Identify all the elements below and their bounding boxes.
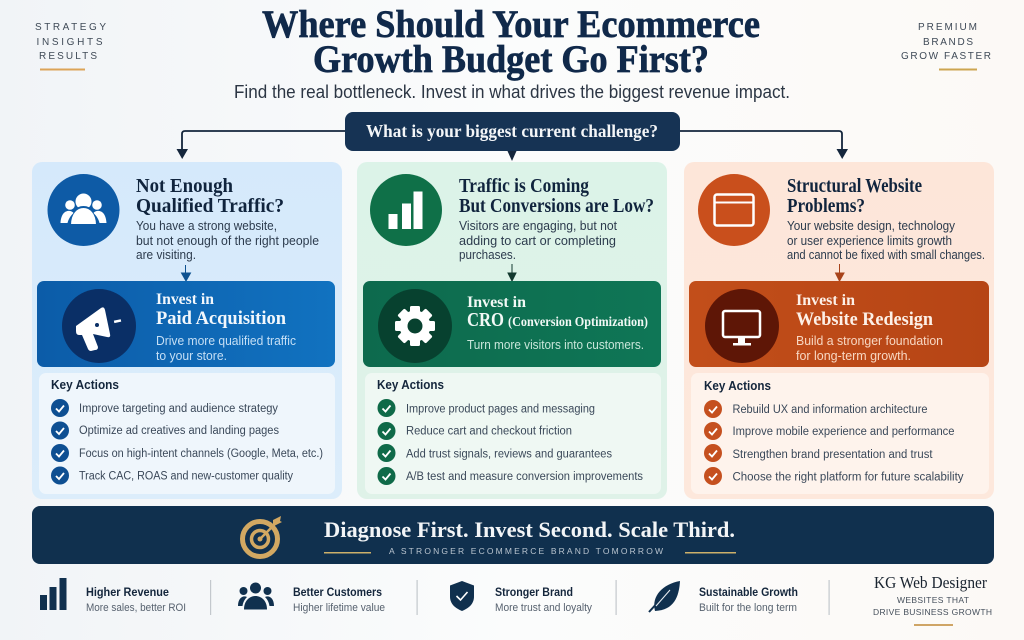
invest box (37, 281, 335, 367)
question pill: What is your biggest current challenge? (366, 121, 658, 141)
key actions (365, 373, 661, 494)
description: but not enough of the right people (136, 233, 319, 248)
text: Invest in (156, 291, 214, 308)
key actions: Rebuild UX and information architecture (732, 404, 928, 416)
description: for long-term growth. (796, 348, 911, 363)
text (156, 291, 286, 329)
right tagline: BRANDS (923, 37, 973, 48)
arrow: to website panel (678, 131, 848, 159)
heading: Qualified Traffic? (136, 195, 284, 217)
brand signature: DRIVE BUSINESS GROWTH (873, 607, 992, 617)
description: and cannot be fixed with small changes. (787, 247, 985, 262)
heading (787, 175, 922, 217)
description (796, 333, 943, 363)
invest box (363, 281, 661, 367)
key actions: Choose the right platform for future scalability (732, 472, 964, 484)
brand signature: KG Web Designer (874, 573, 987, 592)
description (787, 218, 985, 262)
key actions (39, 373, 335, 494)
icon: bars (40, 578, 66, 610)
subtitle: Find the real bottleneck. Invest in what drives the biggest revenue impact. (234, 82, 790, 102)
arrow (508, 264, 516, 281)
key actions (691, 373, 989, 494)
icon: gear (378, 289, 452, 363)
title (262, 3, 760, 81)
key actions: Focus on high-intent channels (Google, Meta, etc.) (79, 448, 323, 460)
text: CRO (467, 309, 504, 331)
text: Website Redesign (796, 309, 933, 330)
heading: Problems? (787, 195, 865, 217)
description: or user experience limits growth (787, 233, 952, 248)
benefit: revenue: Higher Revenue (86, 585, 169, 599)
heading: Not Enough (136, 175, 233, 197)
left tagline (35, 22, 106, 70)
icon: people (48, 174, 120, 246)
invest box (689, 281, 989, 367)
benefit: brand: More trust and loyalty (495, 602, 592, 614)
benefit: revenue: More sales, better ROI (86, 602, 186, 614)
benefit: brand (450, 581, 592, 614)
heading: But Conversions are Low? (459, 195, 654, 217)
key actions: Improve targeting and audience strategy (79, 403, 278, 415)
description: to your store. (156, 348, 227, 363)
left tagline: STRATEGY (35, 22, 106, 33)
brand signature (873, 573, 992, 626)
panel: traffic (32, 162, 342, 499)
benefit: growth (649, 581, 798, 614)
description: Build a stronger foundation (796, 333, 943, 348)
key actions: Track CAC, ROAS and new-customer quality (79, 470, 293, 482)
left tagline: RESULTS (39, 51, 97, 62)
arrow: to traffic panel (176, 131, 346, 159)
key actions: A/B test and measure conversion improvements (406, 471, 643, 483)
key actions: Key Actions (51, 377, 119, 392)
text: (Conversion Optimization) (508, 315, 648, 330)
benefit: growth: Sustainable Growth (699, 585, 798, 599)
benefit: customers: Better Customers (293, 585, 382, 599)
benefit: customers (238, 582, 385, 614)
right tagline: GROW FASTER (901, 51, 991, 62)
description: You have a strong website, (136, 218, 277, 233)
heading (136, 175, 284, 217)
heading (459, 175, 654, 217)
dividers (210, 580, 830, 615)
text (796, 292, 933, 330)
text: Paid Acquisition (156, 308, 286, 329)
title: Where Should Your Ecommerce (262, 3, 760, 46)
arrow: to conversion panel (508, 151, 516, 161)
right tagline (901, 22, 991, 70)
key actions: Add trust signals, reviews and guarantees (406, 448, 612, 460)
icon: monitor (705, 289, 779, 363)
icon: people (238, 582, 274, 610)
text: Invest in (467, 294, 526, 311)
key actions: Key Actions (704, 378, 771, 393)
benefit: customers: Higher lifetime value (293, 602, 385, 614)
description: Your website design, technology (787, 218, 955, 233)
arrow (182, 265, 190, 281)
description: are visiting. (136, 247, 196, 262)
key actions: Improve mobile experience and performance (732, 426, 954, 438)
panel: conversion (357, 162, 667, 499)
icon: browser window (698, 174, 770, 246)
description: Turn more visitors into customers. (467, 337, 644, 352)
icon: target (242, 516, 282, 556)
description: adding to cart or completing (459, 233, 616, 248)
description: purchases. (459, 247, 516, 262)
arrow (836, 264, 844, 281)
icon: leaf (649, 581, 680, 612)
description: Visitors are engaging, but not (459, 218, 617, 233)
text: Invest in (796, 292, 855, 309)
benefit: revenue (40, 578, 186, 614)
key actions: Key Actions (377, 377, 444, 392)
benefit: brand: Stronger Brand (495, 585, 573, 599)
description: Drive more qualified traffic (156, 333, 296, 348)
description (156, 333, 296, 363)
banner subtitle: A STRONGER ECOMMERCE BRAND TOMORROW (389, 546, 663, 556)
panel: website (684, 162, 994, 499)
icon: bar chart (370, 174, 442, 246)
banner heading: Diagnose First. Invest Second. Scale Third. (324, 517, 735, 542)
key actions: Strengthen brand presentation and trust (732, 449, 933, 461)
text (467, 294, 648, 331)
key actions: Reduce cart and checkout friction (406, 426, 572, 438)
heading: Traffic is Coming (459, 175, 589, 197)
title: Growth Budget Go First? (313, 38, 709, 81)
heading: Structural Website (787, 175, 922, 197)
brand signature: WEBSITES THAT (897, 595, 969, 605)
key actions: Improve product pages and messaging (406, 404, 595, 416)
description (136, 218, 319, 262)
benefit: growth: Built for the long term (699, 602, 797, 614)
icon: shield (450, 581, 474, 611)
banner (32, 506, 994, 564)
question pill (345, 112, 680, 151)
icon: megaphone (62, 289, 136, 363)
description (459, 218, 617, 262)
right tagline: PREMIUM (918, 22, 977, 33)
left tagline: INSIGHTS (36, 37, 103, 48)
key actions: Optimize ad creatives and landing pages (79, 425, 279, 437)
